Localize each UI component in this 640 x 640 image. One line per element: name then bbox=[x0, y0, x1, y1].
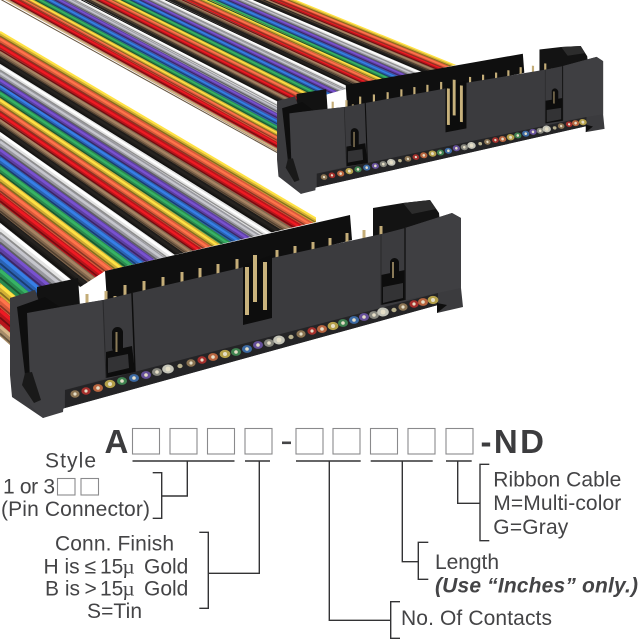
upper ribbon cable bbox=[0, 0, 456, 154]
part number boxes group 2 bbox=[296, 428, 473, 454]
label: connector finish: > bbox=[84, 578, 97, 601]
label: ribbon cable bbox=[493, 469, 621, 539]
lower connector bbox=[10, 200, 463, 418]
label: connector finish: 15 bbox=[100, 555, 123, 578]
label: style: Style bbox=[45, 450, 96, 472]
label: ribbon cable: M=Multi-color bbox=[493, 492, 621, 515]
label: length bbox=[435, 551, 638, 597]
label: ribbon cable: G=Gray bbox=[493, 516, 569, 539]
label: connector finish: µ bbox=[122, 554, 135, 578]
label: connector finish: Gold bbox=[144, 555, 188, 578]
label: length: Length bbox=[435, 551, 499, 574]
label: ribbon cable: Ribbon Cable bbox=[493, 469, 621, 492]
label: length: (Use “Inches” only.) bbox=[435, 574, 638, 597]
label: style bbox=[1, 450, 150, 521]
upper connector bbox=[277, 27, 605, 213]
leader: style bbox=[153, 461, 187, 518]
leader: length bbox=[402, 461, 428, 579]
part number boxes group 1 bbox=[132, 428, 272, 454]
label: number of contacts: No. Of Contacts bbox=[401, 607, 552, 630]
part number prefix A: A bbox=[104, 423, 128, 460]
lower ribbon cable bbox=[0, 31, 316, 345]
leader: number of contacts bbox=[329, 461, 400, 638]
leader: connector finish bbox=[199, 461, 259, 608]
part number diagram bbox=[1, 423, 638, 638]
part number suffix -ND: -ND bbox=[480, 423, 546, 460]
label: connector finish: 15 bbox=[100, 578, 123, 601]
label: connector finish: S=Tin bbox=[87, 600, 142, 623]
label: connector finish: Gold bbox=[144, 578, 188, 601]
part number dash bbox=[282, 442, 291, 444]
label: connector finish: µ bbox=[122, 577, 135, 601]
label: connector finish: Conn. Finish bbox=[55, 533, 174, 556]
label: connector finish: ≤ bbox=[84, 555, 96, 578]
label: connector finish: H is bbox=[44, 555, 80, 578]
underlines bbox=[132, 460, 472, 462]
label: connector finish bbox=[44, 533, 188, 623]
label: style: (Pin Connector) bbox=[1, 498, 150, 521]
label: connector finish: B is bbox=[45, 578, 80, 601]
leader: ribbon cable bbox=[458, 461, 489, 541]
label: style: 1 or 3 bbox=[3, 475, 55, 498]
